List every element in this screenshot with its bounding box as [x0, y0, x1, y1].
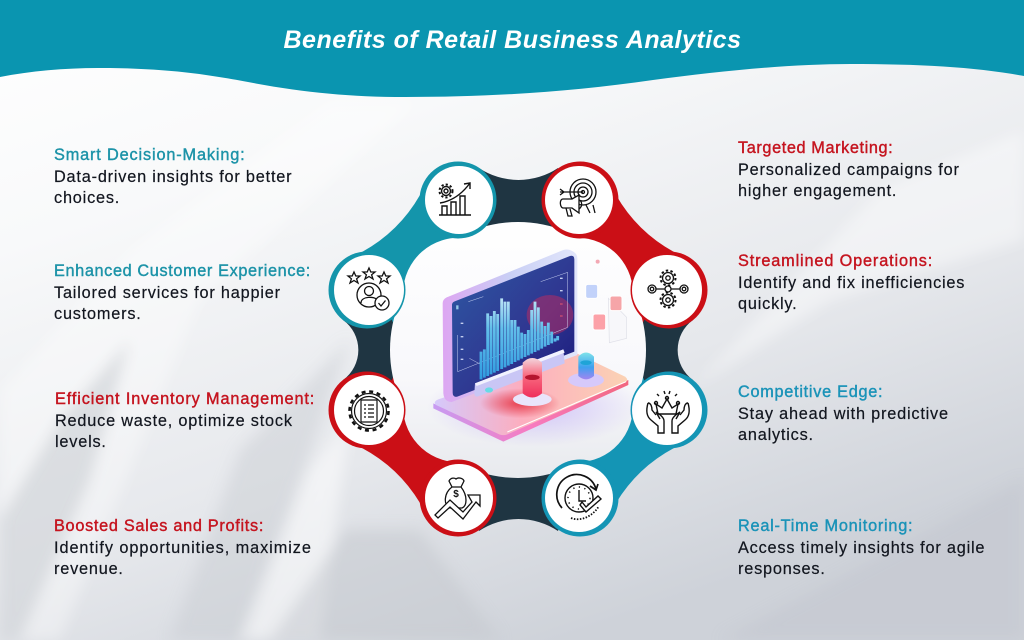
chart base bar	[474, 349, 565, 397]
left text: smart decision-making: choices.	[54, 189, 120, 207]
right text: competitive edge: Competitive Edge:	[738, 383, 883, 401]
platform shadow	[427, 367, 640, 447]
bar chart	[481, 298, 558, 379]
header band	[0, 0, 1024, 97]
right text: real-time monitoring: responses.	[738, 560, 826, 578]
left text: enhanced customer experience	[54, 262, 311, 323]
platform	[433, 380, 628, 442]
left text: boosted sales and profits: revenue.	[54, 560, 124, 578]
left text: efficient inventory management: Efficient Inventory Management:	[55, 390, 315, 408]
dark connector: bottom	[458, 460, 580, 531]
left text: efficient inventory management: levels.	[55, 433, 107, 451]
left text: smart decision-making	[54, 146, 292, 207]
icon: stars and customer	[348, 268, 390, 310]
right text: targeted marketing	[738, 139, 960, 200]
red cylinder	[513, 393, 552, 406]
icon: money bag and growth arrow	[435, 478, 480, 519]
white discs	[334, 166, 702, 532]
node: right lower	[630, 372, 708, 448]
icon: connected gears	[648, 270, 688, 308]
right text: real-time monitoring: Access timely insights for agile	[738, 539, 985, 557]
dollar sign: $	[453, 489, 459, 500]
right text: streamlined operations	[738, 252, 965, 313]
left text: boosted sales and profits	[54, 517, 312, 578]
icon: checklist gear	[350, 392, 388, 430]
right text: competitive edge	[738, 383, 949, 444]
icon: crown and hands	[647, 391, 689, 433]
right text: real-time monitoring: Real-Time Monitoring:	[738, 517, 913, 535]
node: right upper	[630, 252, 708, 328]
right text: targeted marketing: higher engagement.	[738, 182, 897, 200]
dark connector: top	[458, 168, 580, 240]
center area	[390, 222, 646, 478]
red band top right	[536, 195, 674, 350]
floating cards	[608, 298, 627, 343]
dark connector: left	[343, 290, 410, 410]
left text: boosted sales and profits: Boosted Sales and Profits:	[54, 517, 264, 535]
axis lines and labels on screen	[457, 272, 568, 372]
blue band bottom right	[536, 350, 674, 503]
node: top right	[542, 162, 618, 238]
title: Benefits of Retail Business Analytics	[284, 26, 741, 54]
right text: real-time monitoring	[738, 517, 985, 578]
right text: streamlined operations: Identify and fix inefficiencies	[738, 274, 965, 292]
red glow	[480, 388, 560, 418]
node: left lower	[328, 372, 406, 448]
red band bottom left	[362, 350, 500, 503]
right text: targeted marketing: Personalized campaigns for	[738, 161, 960, 179]
node: top left	[420, 162, 496, 238]
dark connector: right	[626, 290, 693, 410]
teal band	[362, 195, 500, 350]
central dashboard illustration	[427, 249, 640, 447]
left text: boosted sales and profits: Identify opportunities, maximize	[54, 539, 312, 557]
left text: enhanced customer experience: Enhanced Customer Experience:	[54, 262, 311, 280]
icon: target and megaphone	[560, 179, 596, 216]
left text: enhanced customer experience: customers.	[54, 305, 142, 323]
left text: efficient inventory management	[55, 390, 315, 451]
left text: smart decision-making: Data-driven insights for better	[54, 168, 292, 186]
node: left upper	[328, 252, 406, 328]
right text: competitive edge: Stay ahead with predictive	[738, 405, 949, 423]
monitor screen	[452, 256, 574, 397]
right text: targeted marketing: Targeted Marketing:	[738, 139, 893, 157]
icon: gear and growth chart	[439, 183, 471, 215]
right text: streamlined operations: Streamlined Operations:	[738, 252, 933, 270]
left text: enhanced customer experience: Tailored services for happier	[54, 284, 281, 302]
node: bottom right	[542, 460, 618, 536]
node: bottom left	[420, 460, 496, 536]
left text: efficient inventory management: Reduce waste, optimize stock	[55, 412, 293, 430]
icon: clock with check	[557, 475, 601, 519]
right text: competitive edge: analytics.	[738, 426, 814, 444]
right text: streamlined operations: quickly.	[738, 295, 797, 313]
left text: smart decision-making: Smart Decision-Making:	[54, 146, 246, 164]
monitor frame	[443, 249, 577, 402]
blue cylinder	[568, 373, 604, 387]
